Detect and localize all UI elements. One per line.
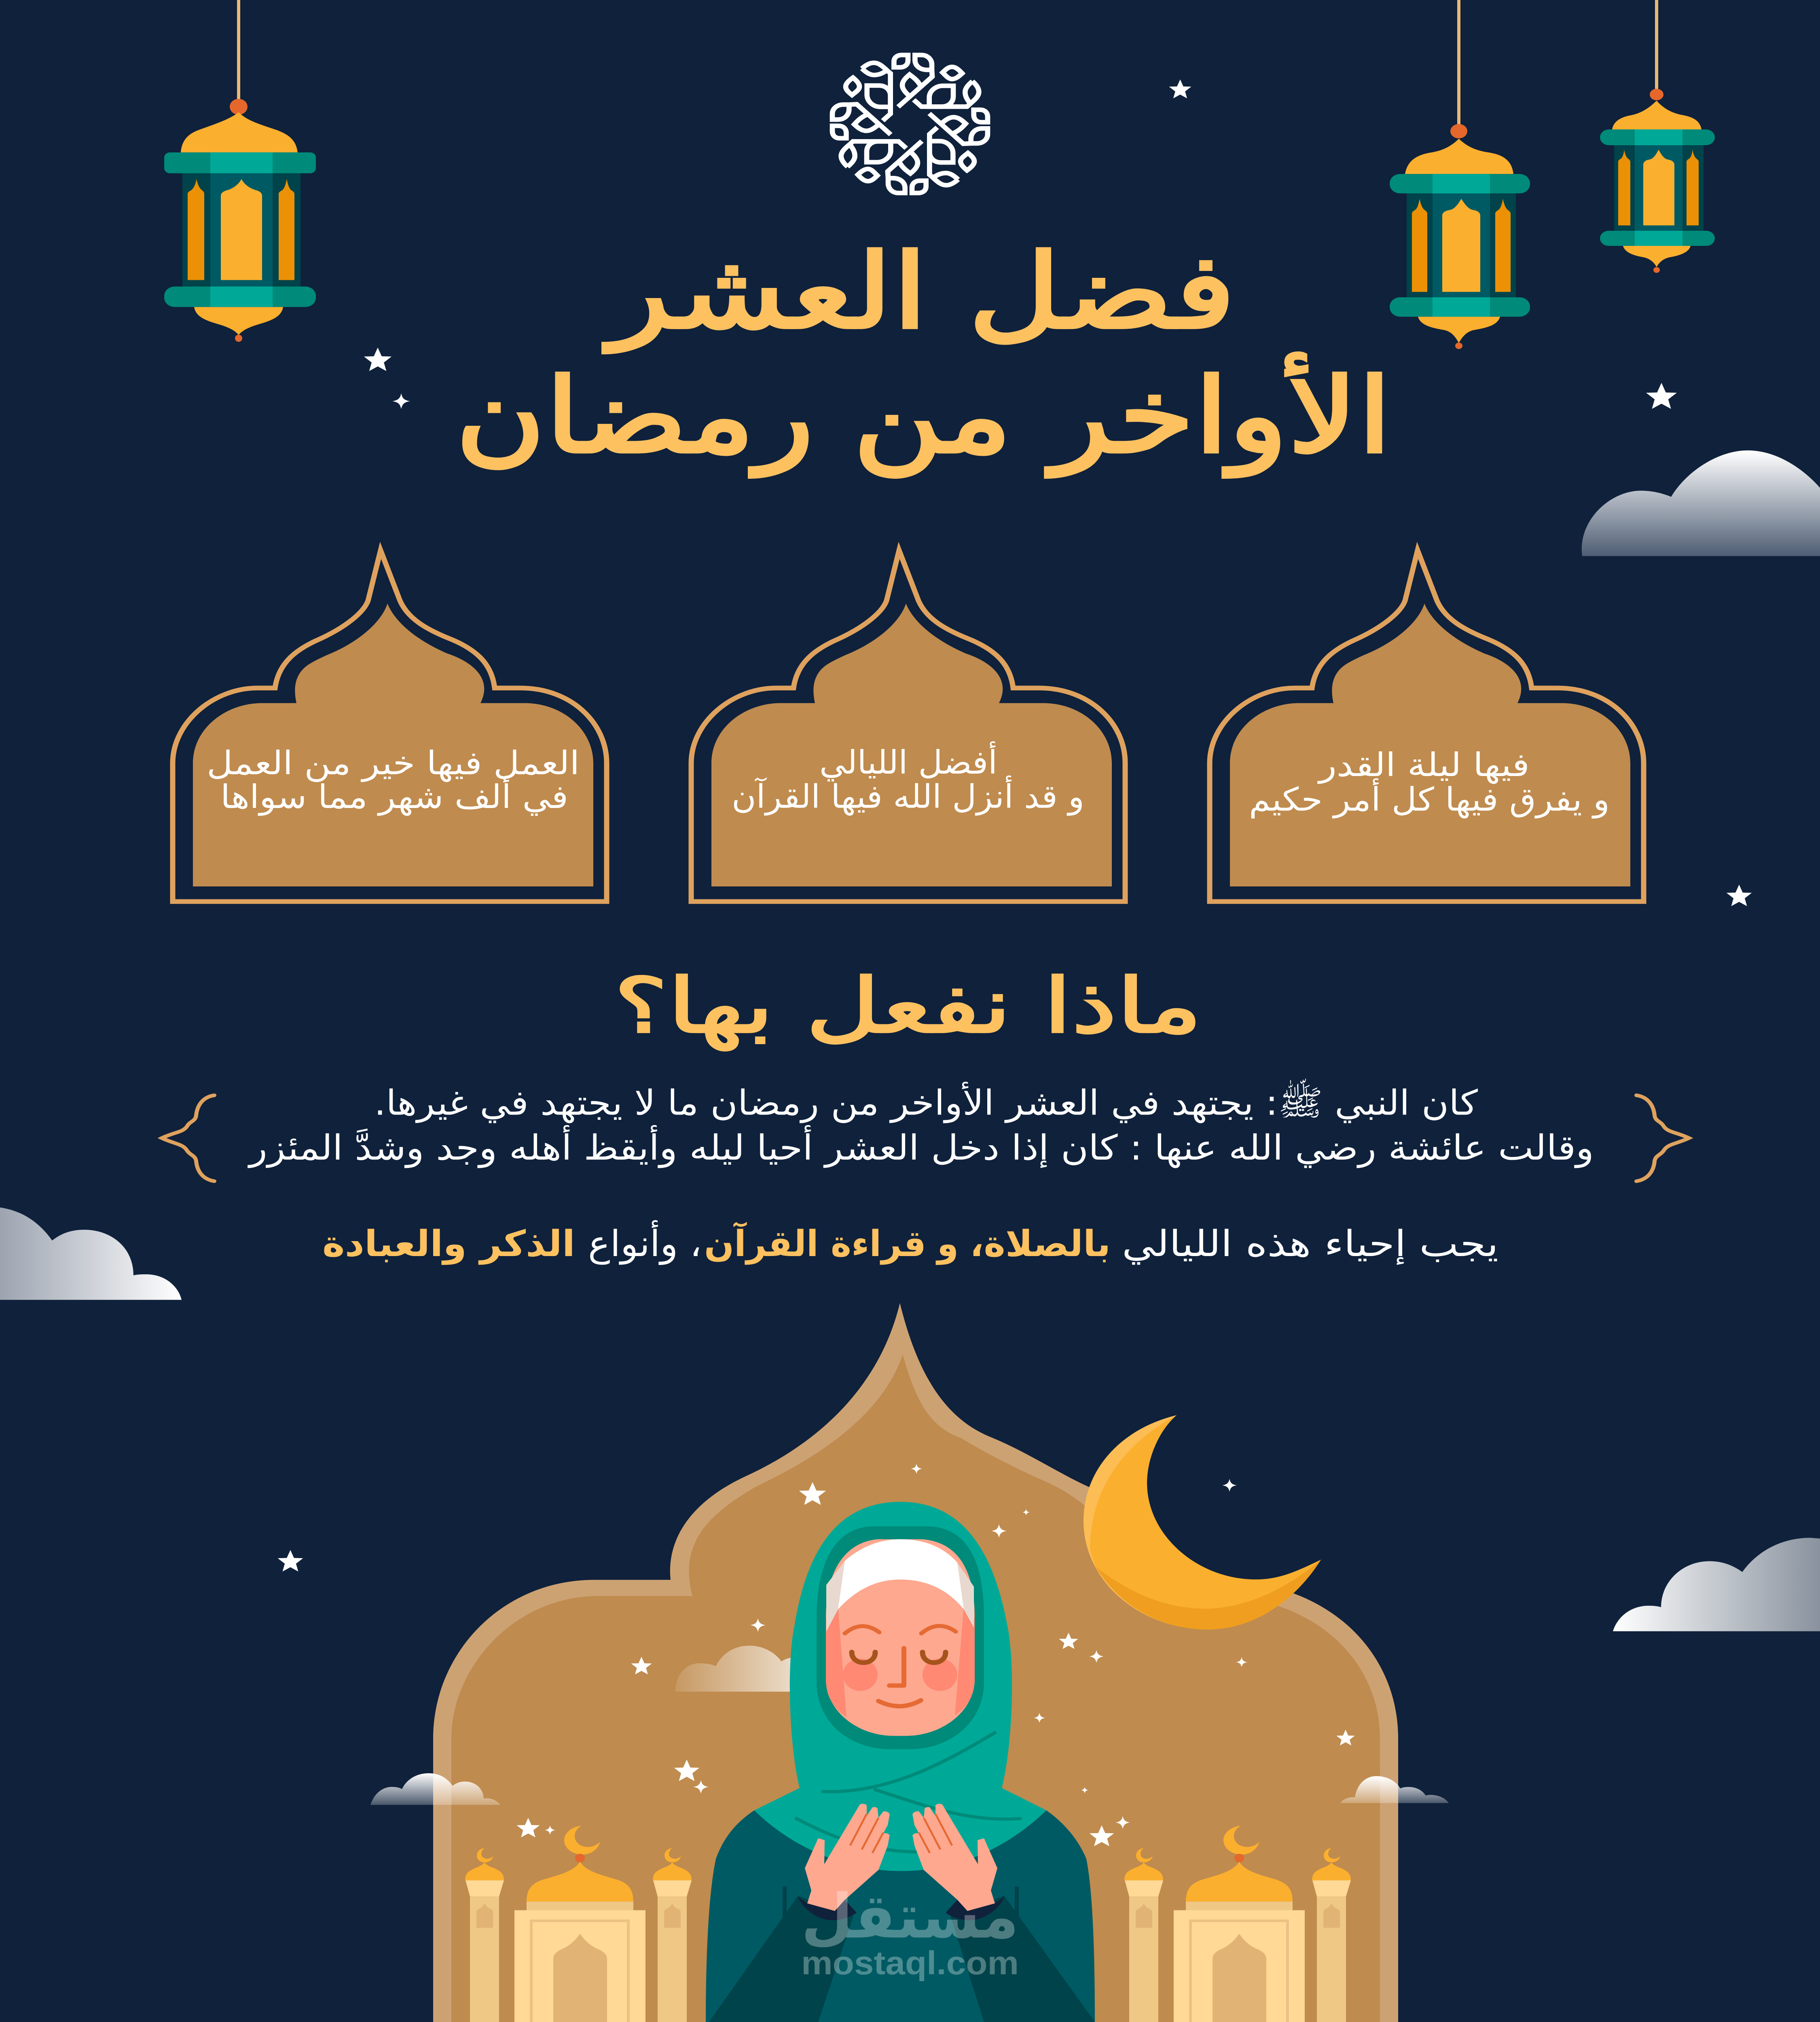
- illustration: right mosque: [1124, 1826, 1351, 2022]
- card middle text: أفضل الليالي: [819, 741, 997, 782]
- icon: geometric rosette logo: [832, 55, 988, 193]
- card middle text: و قد أنزل الله فيها القرآن: [732, 775, 1084, 816]
- text block: call to worship: الذكر والعبادة: [322, 1223, 575, 1265]
- illustration: crescent moon: [1084, 1415, 1321, 1629]
- text block: call to worship: ‏، وأنواع: [588, 1220, 702, 1265]
- title line 2: الأواخر من رمضان: [455, 351, 1392, 478]
- text block: call to worship: و: [935, 1223, 959, 1265]
- woman face: [826, 1539, 975, 1736]
- woman hijab: [754, 1502, 1046, 1871]
- arch: inner panel: [451, 1354, 1380, 2022]
- card left text: [207, 745, 580, 816]
- text block: call to worship: بالصلاة،‏: [970, 1223, 1111, 1265]
- cloud: middle left: [0, 1208, 182, 1300]
- woman robe: [706, 1810, 1095, 2022]
- cloud: small left over arch: [370, 1773, 500, 1805]
- cloud: lower right: [1613, 1538, 1820, 1631]
- star: lower left: [278, 1550, 303, 1571]
- panel: card left: [173, 550, 607, 901]
- hadith line 1: كان النبي ﷺ: يجتهد في العشر الأواخر من رمضان ما لا يجتهد في غيرها.‏: [374, 1078, 1478, 1123]
- panel: card middle: [691, 550, 1125, 901]
- cloud: top right: [1582, 451, 1820, 556]
- card right text: فيها ليلة القدر: [1317, 747, 1530, 784]
- watermark: [801, 1881, 1019, 1982]
- hadith line 2: وقالت عائشة رضي الله عنها : كان إذا دخل العشر أحيا ليله وأيقظ أهله وجد وشدَّ المئزر: [248, 1125, 1594, 1168]
- left mosque central hall: [514, 1826, 645, 2022]
- arch: outer frame: [433, 1303, 1398, 2022]
- watermark latin: mostaql.com: [801, 1944, 1019, 1982]
- bracket: left: [162, 1095, 214, 1181]
- icon: middle hanging lantern: [1390, 0, 1530, 349]
- title line 1: فضل العشر: [603, 232, 1236, 353]
- text block: call to worship: قراءة القرآن: [704, 1221, 926, 1265]
- card right text: و يفرق فيها كل أمر حكيم: [1249, 778, 1610, 819]
- stars inside arch: [517, 1464, 1355, 1846]
- cloud: small right over arch: [1340, 1776, 1449, 1803]
- panel: card right: [1210, 550, 1644, 901]
- illustration: left mosque: [465, 1826, 692, 2022]
- left mosque minarets: [465, 1848, 692, 2022]
- card left text: في ألف شهر مما سواها: [220, 775, 568, 816]
- card right text: [1249, 747, 1610, 819]
- watermark arabic: مستقل: [801, 1881, 1019, 1952]
- woman hands: [798, 1804, 1004, 1920]
- card middle text: [732, 741, 1084, 816]
- bracket: right: [1636, 1095, 1689, 1181]
- text block: hadith: [248, 1078, 1594, 1168]
- text block: call to worship: [322, 1220, 1498, 1265]
- text block: call to worship: يجب إحياء هذه الليالي: [1122, 1223, 1498, 1265]
- heading: what do we do: ماذا نفعل بها؟: [614, 962, 1202, 1051]
- illustration: praying woman: [706, 1502, 1095, 2022]
- card left text: العمل فيها خير من العمل: [207, 745, 580, 782]
- icon: right hanging lantern: [1600, 0, 1715, 273]
- icon: left hanging lantern: [164, 0, 316, 342]
- title: [455, 232, 1392, 478]
- top stars: [364, 79, 1752, 906]
- cloud: inside arch behind figure: [675, 1646, 799, 1692]
